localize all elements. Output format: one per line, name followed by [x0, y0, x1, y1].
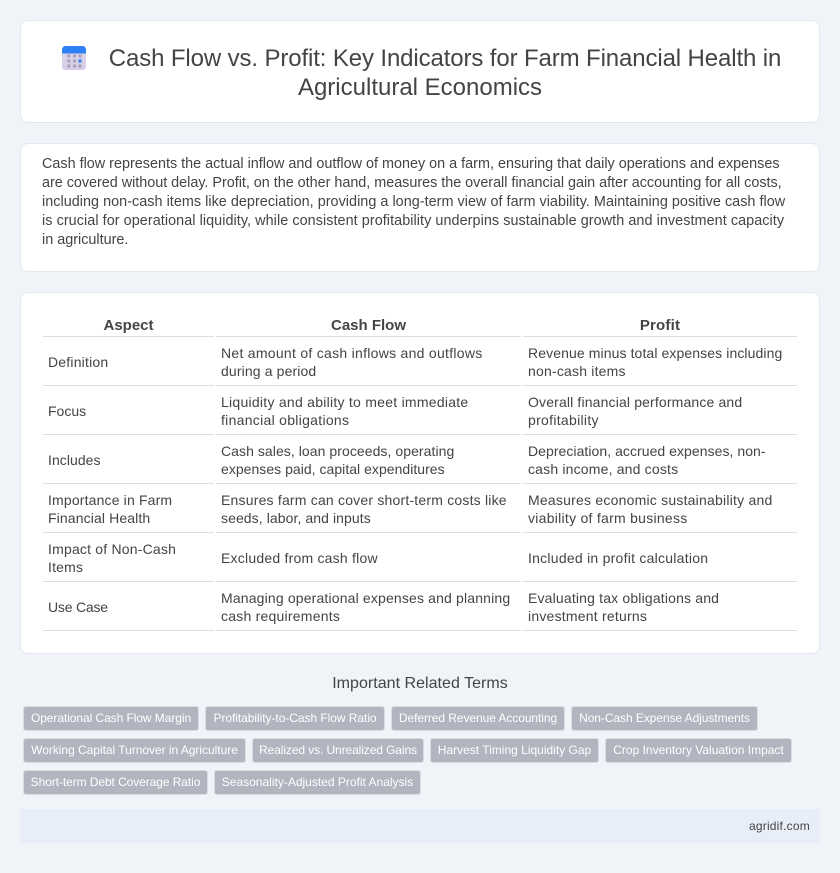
tag: Non-Cash Expense Adjustments	[579, 711, 750, 725]
includes profit: cash income, and costs	[528, 461, 678, 477]
tag: Seasonality-Adjusted Profit Analysis	[222, 775, 413, 789]
table header: Aspect	[103, 317, 154, 334]
tag	[214, 770, 421, 795]
focus cash flow	[221, 394, 468, 428]
use case cash flow: Managing operational expenses and planning	[221, 590, 510, 606]
tag: Harvest Timing Liquidity Gap	[438, 743, 591, 757]
importance profit: viability of farm business	[528, 510, 688, 526]
tag	[430, 738, 599, 763]
tag	[252, 738, 424, 763]
intro text: is crucial for operational liquidity, while consistent profitability underpins sustainable growth and investment capacity	[42, 213, 784, 229]
row: non-cash items: Impact of Non-Cash	[48, 541, 176, 557]
footer source: agridif.com	[749, 819, 810, 833]
tag	[391, 706, 565, 731]
includes cash flow: expenses paid, capital expenditures	[221, 461, 445, 477]
use case profit	[528, 590, 719, 624]
importance cash flow	[221, 492, 507, 526]
title line 2: Agricultural Economics	[298, 74, 542, 101]
row: definition: Definition	[48, 354, 108, 370]
row: non-cash items: Items	[48, 559, 83, 575]
tag: Crop Inventory Valuation Impact	[613, 743, 784, 757]
importance cash flow: Ensures farm can cover short-term costs like	[221, 492, 507, 508]
tag: Working Capital Turnover in Agriculture	[31, 743, 238, 757]
intro text: in agriculture.	[42, 232, 128, 248]
focus cash flow: financial obligations	[221, 412, 349, 428]
definition profit	[528, 345, 782, 379]
use case profit: Evaluating tax obligations and	[528, 590, 719, 606]
tag	[605, 738, 792, 763]
intro text: including non-cash items like depreciation, providing a long-term view of farm viability. Maintaining positive cash flow	[42, 194, 785, 210]
definition profit: Revenue minus total expenses including	[528, 345, 782, 361]
intro text: are covered without delay. Profit, on the other hand, measures the overall financial gain after accounting for all costs,	[42, 175, 782, 191]
focus profit	[528, 394, 742, 428]
footer bar	[20, 809, 820, 843]
includes cash flow: Cash sales, loan proceeds, operating	[221, 443, 454, 459]
tag	[23, 738, 246, 763]
row: focus: Focus	[48, 403, 86, 419]
non-cash cash flow: Excluded from cash flow	[221, 550, 378, 566]
icon: calendar	[62, 46, 86, 70]
includes profit	[528, 443, 766, 477]
tag: Profitability-to-Cash Flow Ratio	[213, 711, 377, 725]
tag	[571, 706, 758, 731]
definition cash flow: Net amount of cash inflows and outflows	[221, 345, 482, 361]
tag	[205, 706, 385, 731]
importance profit: Measures economic sustainability and	[528, 492, 772, 508]
row: use case: Use Case	[48, 599, 108, 615]
tag: Deferred Revenue Accounting	[399, 711, 557, 725]
tag: Short-term Debt Coverage Ratio	[31, 775, 200, 789]
focus profit: profitability	[528, 412, 599, 428]
related terms heading: Important Related Terms	[332, 675, 508, 692]
includes profit: Depreciation, accrued expenses, non-	[528, 443, 766, 459]
non-cash profit: Included in profit calculation	[528, 550, 708, 566]
row: importance: Importance in Farm	[48, 492, 172, 508]
definition profit: non-cash items	[528, 363, 626, 379]
intro text: Cash flow represents the actual inflow and outflow of money on a farm, ensuring that daily operations and expenses	[42, 156, 780, 172]
title: Cash Flow vs. Profit: Key Indicators for Farm Financial Health in	[109, 45, 781, 72]
use case profit: investment returns	[528, 608, 647, 624]
tag	[23, 706, 199, 731]
row: includes: Includes	[48, 452, 101, 468]
tag	[23, 770, 208, 795]
header card	[20, 20, 820, 123]
row: importance: Financial Health	[48, 510, 150, 526]
focus profit: Overall financial performance and	[528, 394, 742, 410]
tag: Realized vs. Unrealized Gains	[259, 743, 417, 757]
use case cash flow: cash requirements	[221, 608, 340, 624]
focus cash flow: Liquidity and ability to meet immediate	[221, 394, 468, 410]
includes cash flow	[221, 443, 454, 477]
importance profit	[528, 492, 772, 526]
use case cash flow	[221, 590, 510, 624]
table header: cash flow: Cash Flow	[331, 317, 406, 334]
intro text	[42, 156, 786, 248]
table header: profit: Profit	[640, 317, 680, 334]
intro panel	[20, 143, 820, 272]
tag: Operational Cash Flow Margin	[31, 711, 191, 725]
definition cash flow	[221, 345, 482, 379]
importance cash flow: seeds, labor, and inputs	[221, 510, 371, 526]
comparison table panel	[20, 292, 820, 654]
row: non-cash items	[48, 541, 176, 575]
row: importance	[48, 492, 172, 526]
definition cash flow: during a period	[221, 363, 316, 379]
